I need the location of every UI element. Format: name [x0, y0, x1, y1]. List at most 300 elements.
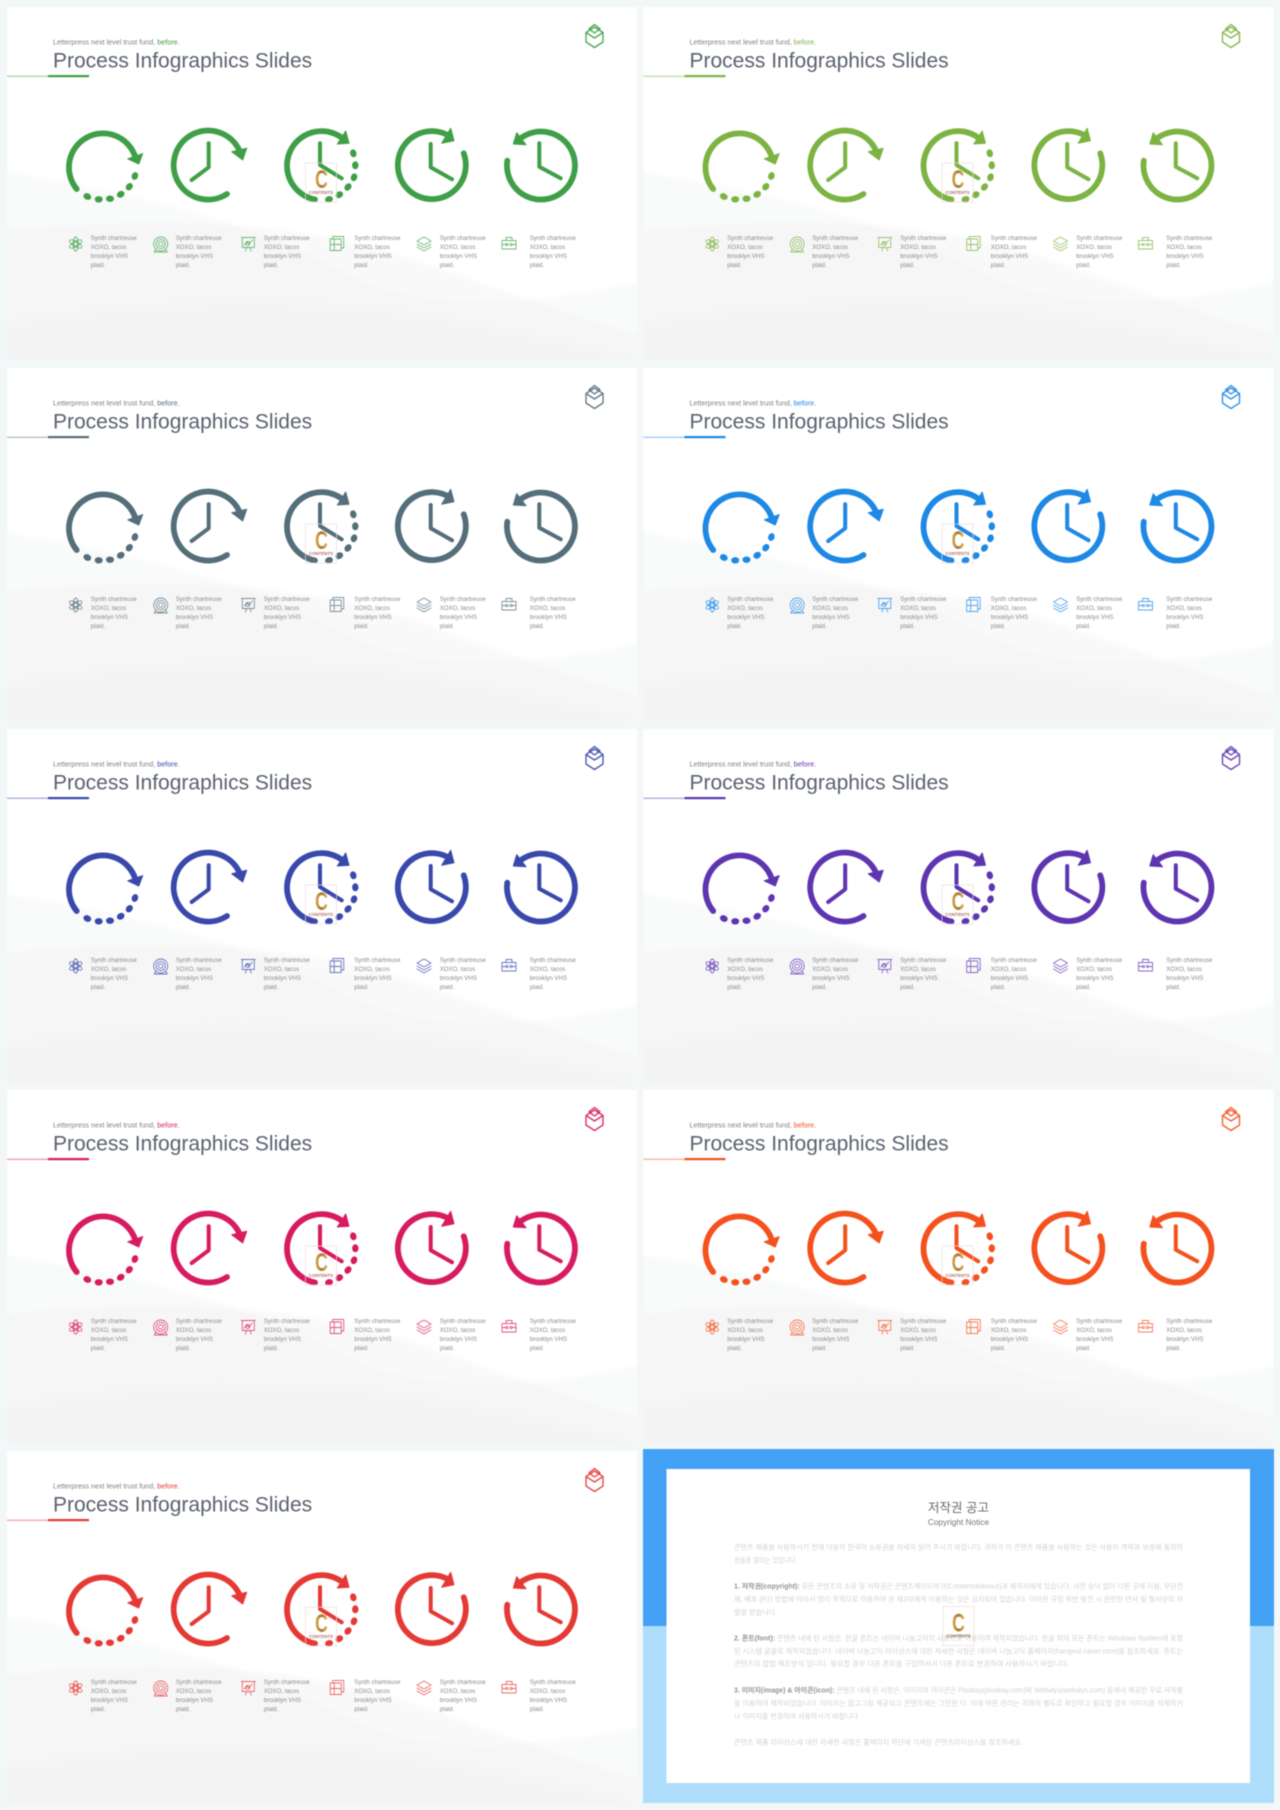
notice section 1: 벌을 받습니다. [734, 1608, 777, 1616]
notice section 3: 3. 이미지(image) & 아이콘(icon): 콘텐츠 내에 된 사항은, 이미지와 아이콘은 Pixabay(pixabay.com)와 Webalys(webalys.com) 등에서 제공한 무료 저작물 [734, 1686, 1184, 1694]
item 5: Synth chartreuse [440, 957, 486, 964]
item 5: XOXO, tacos [440, 1688, 475, 1695]
panel: purple [632, 729, 1280, 1092]
item 5 [1054, 1318, 1123, 1352]
item 1: plaid. [727, 984, 742, 991]
item 6 [1138, 235, 1213, 269]
rule [7, 1519, 89, 1521]
white card [666, 1469, 1250, 1783]
heading: Letterpress next level trust fund, before. [53, 1120, 180, 1130]
item 4: plaid. [354, 623, 369, 630]
item 2: brooklyn VHS [812, 614, 849, 621]
clock 3 [924, 853, 995, 925]
heading [53, 760, 312, 794]
item 3: XOXO, tacos [900, 966, 936, 973]
item 2: XOXO, tacos [176, 1688, 211, 1695]
item 4: Synth chartreuse [354, 957, 400, 964]
item 6: XOXO, tacos [530, 244, 565, 251]
item 5: plaid. [440, 1706, 455, 1713]
item 3: brooklyn VHS [900, 1336, 937, 1343]
watermark [306, 163, 336, 202]
heading: Process Infographics Slides [690, 410, 949, 434]
notice intro: 콘텐츠 제품을 사용하시기 전에 다음의 한국어 소유권을 자세히 읽어 주시기 바랍니다. 귀하가 이 콘텐츠 제품을 사용하는 것은 사용자 계약과 보증에 동의하 [734, 1542, 1184, 1552]
item 2 [790, 235, 859, 269]
item 4: brooklyn VHS [991, 253, 1028, 260]
clock 1 [705, 855, 779, 924]
clock 3 [287, 1214, 358, 1286]
item 5: XOXO, tacos [440, 244, 475, 251]
item 1 [68, 235, 137, 269]
item 5: brooklyn VHS [1076, 253, 1113, 260]
heading: Process Infographics Slides [53, 772, 312, 794]
item 3: plaid. [900, 262, 915, 269]
item 6: plaid. [1166, 623, 1181, 630]
item 6: plaid. [1166, 262, 1181, 269]
item 1 [68, 1679, 137, 1713]
item 3 [241, 957, 310, 991]
notice section 2: 된 시스템 글꼴로 제작되었습니다. 네이버 나눔고딕 라이선스에 대한 자세한 사항은 네이버 나눔고딕 홈페이지(hangeul.naver.com)를 참조하세요. 폰트는 [734, 1646, 1184, 1656]
panel: green [0, 7, 650, 370]
item 2: brooklyn VHS [176, 614, 213, 621]
watermark: CONTENTS [945, 1273, 970, 1278]
clock 2 [174, 1214, 247, 1283]
rule [7, 1158, 89, 1160]
rule [644, 797, 726, 799]
heading [690, 1120, 949, 1156]
item 5 [417, 1318, 486, 1352]
watermark [943, 1606, 974, 1646]
item 2: Synth chartreuse [176, 596, 222, 603]
panel: blue [632, 368, 1280, 731]
heading [53, 1482, 312, 1516]
item 5: plaid. [1076, 623, 1091, 630]
clock 1 [69, 494, 143, 564]
item 3: XOXO, tacos [900, 1327, 936, 1334]
item 1 [68, 1318, 137, 1352]
item 5: plaid. [440, 984, 455, 991]
item 5: XOXO, tacos [440, 605, 475, 612]
notice section 3: 나 이미지를 변경하여 사용하시기 바랍니다. [734, 1712, 860, 1720]
clock 4 [1034, 489, 1102, 560]
item 5: Synth chartreuse [440, 596, 486, 603]
item 1: plaid. [727, 1345, 742, 1352]
clock 2 [174, 1575, 247, 1644]
item 4 [967, 957, 1037, 991]
rule [7, 797, 89, 799]
heading [53, 398, 312, 434]
item 5 [1054, 235, 1123, 269]
item 6: brooklyn VHS [530, 1336, 567, 1343]
icon: cube [586, 1468, 603, 1492]
item 2: XOXO, tacos [812, 244, 848, 251]
item 3 [241, 1318, 310, 1352]
item 3 [241, 1679, 310, 1713]
item 3: XOXO, tacos [264, 605, 299, 612]
heading [690, 38, 949, 72]
item 1: plaid. [91, 623, 106, 630]
item 3: brooklyn VHS [900, 253, 937, 260]
item 4 [967, 1318, 1037, 1352]
heading: Letterpress next level trust fund, before. [53, 760, 180, 768]
item 2: brooklyn VHS [812, 975, 849, 982]
item 2: XOXO, tacos [812, 1327, 848, 1334]
item 6: brooklyn VHS [530, 975, 567, 982]
item 5: plaid. [440, 262, 455, 269]
item 5 [417, 235, 486, 269]
icon: cube [1222, 386, 1240, 408]
item 4: XOXO, tacos [991, 966, 1026, 973]
item 6: plaid. [1166, 1345, 1181, 1352]
item 6: XOXO, tacos [530, 605, 565, 612]
item 2: plaid. [176, 1345, 191, 1352]
item 4: Synth chartreuse [991, 957, 1037, 964]
item 3: XOXO, tacos [264, 1688, 299, 1695]
notice section 1 [734, 1582, 1183, 1616]
notice title [928, 1501, 990, 1527]
item 1: plaid. [91, 262, 106, 269]
rule [644, 75, 726, 77]
watermark: CONTENTS [945, 551, 970, 556]
item 4: plaid. [354, 262, 369, 269]
item 4: XOXO, tacos [354, 605, 390, 612]
heading: Process Infographics Slides [53, 1494, 312, 1516]
item 1: brooklyn VHS [727, 975, 764, 982]
item 4: plaid. [354, 1345, 369, 1352]
clock 3 [287, 1575, 358, 1647]
item 6: Synth chartreuse [1166, 596, 1212, 603]
heading: Letterpress next level trust fund, before. [53, 398, 180, 408]
item 4 [330, 957, 401, 991]
item 1: XOXO, tacos [91, 605, 126, 612]
item 1 [705, 957, 774, 991]
watermark: C [315, 166, 328, 194]
item 3: Synth chartreuse [264, 957, 310, 964]
clock 2 [810, 853, 883, 922]
clock 3 [287, 853, 358, 925]
clock 1 [705, 1216, 779, 1286]
watermark: CONTENTS [309, 1273, 333, 1278]
clock 2 [810, 1214, 883, 1283]
item 3: brooklyn VHS [264, 1336, 301, 1343]
item 5: brooklyn VHS [440, 1697, 477, 1704]
item 1: XOXO, tacos [91, 1327, 126, 1334]
item 6: XOXO, tacos [1166, 244, 1202, 251]
watermark: C [952, 527, 964, 555]
heading: Process Infographics Slides [690, 50, 949, 72]
heading: Process Infographics Slides [690, 1132, 949, 1156]
rule [7, 436, 89, 438]
item 3: Synth chartreuse [264, 1679, 310, 1686]
item 1 [705, 235, 774, 269]
item 5: XOXO, tacos [1076, 244, 1112, 251]
clock 5 [507, 1215, 575, 1283]
item 3 [878, 596, 947, 630]
item 4: brooklyn VHS [354, 253, 392, 260]
clock 5 [1143, 854, 1211, 922]
item 6: XOXO, tacos [1166, 966, 1202, 973]
notice section 2: 2. 폰트(font): 콘텐츠 내에 된 사항은, 한글 폰트는 네이버 나눔고딕의 사용으로 이용하여 제작되었습니다. 한글 외의 모든 폰트는 Windows System에 포함 [734, 1634, 1184, 1642]
item 5: Synth chartreuse [1076, 596, 1122, 603]
item 6: brooklyn VHS [1166, 975, 1203, 982]
watermark: CONTENTS [309, 1634, 333, 1639]
item 2: plaid. [812, 262, 827, 269]
item 5: plaid. [1076, 984, 1091, 991]
watermark: CONTENTS [309, 551, 333, 556]
item 1: brooklyn VHS [727, 253, 764, 260]
heading [690, 760, 949, 794]
item 5: brooklyn VHS [1076, 614, 1113, 621]
item 4: plaid. [991, 623, 1006, 630]
item 5: brooklyn VHS [440, 614, 477, 621]
item 6: Synth chartreuse [530, 1679, 576, 1686]
item 5 [417, 957, 486, 991]
item 4 [967, 235, 1037, 269]
item 1: Synth chartreuse [727, 957, 773, 964]
item 4: XOXO, tacos [354, 966, 390, 973]
item 2: brooklyn VHS [176, 1697, 213, 1704]
watermark: CONTENTS [946, 1634, 971, 1638]
clock 1 [69, 1216, 143, 1286]
item 4: brooklyn VHS [991, 1336, 1028, 1343]
clock 5 [1143, 493, 1211, 561]
item 4: brooklyn VHS [354, 614, 392, 621]
item 1 [68, 957, 137, 991]
item 1: brooklyn VHS [91, 1697, 128, 1704]
clock 2 [174, 131, 247, 200]
item 3: brooklyn VHS [900, 975, 937, 982]
item 1: brooklyn VHS [727, 614, 764, 621]
panel: indigo [0, 729, 650, 1092]
item 2: brooklyn VHS [812, 253, 849, 260]
item 3: XOXO, tacos [900, 605, 936, 612]
item 6: plaid. [530, 1706, 545, 1713]
clock 5 [1143, 1215, 1211, 1283]
heading: Letterpress next level trust fund, before. [690, 760, 816, 768]
item 1: brooklyn VHS [91, 1336, 128, 1343]
watermark [942, 163, 973, 202]
item 3: Synth chartreuse [264, 1318, 310, 1325]
clock 3 [287, 131, 358, 203]
notice intro [734, 1542, 1184, 1564]
item 5: brooklyn VHS [440, 975, 477, 982]
item 5: brooklyn VHS [1076, 1336, 1113, 1343]
panel: slate [0, 368, 650, 731]
item 6: XOXO, tacos [1166, 605, 1202, 612]
item 5: Synth chartreuse [1076, 957, 1122, 964]
icon: cube [1222, 24, 1240, 48]
item 2: XOXO, tacos [176, 605, 211, 612]
clock 3 [287, 492, 358, 564]
item 5: Synth chartreuse [1076, 235, 1122, 242]
item 6 [502, 957, 576, 991]
clock 5 [1143, 132, 1211, 200]
item 2: Synth chartreuse [812, 596, 858, 603]
item 3: plaid. [264, 1706, 279, 1713]
heading [53, 1120, 312, 1156]
clock 4 [398, 1572, 466, 1643]
item 4: brooklyn VHS [354, 975, 392, 982]
clock 4 [1034, 128, 1102, 199]
item 3: XOXO, tacos [900, 244, 936, 251]
item 1: XOXO, tacos [727, 966, 763, 973]
item 4: Synth chartreuse [354, 596, 400, 603]
notice section 2: 콘텐츠의 합법 제조방식 입니다. 필요할 경우 다른 폰트를 구입하셔서 다른 폰트로 변경하여 사용하시기 바랍니다. [734, 1659, 1069, 1668]
item 3 [241, 596, 310, 630]
item 3: XOXO, tacos [264, 244, 299, 251]
item 2: XOXO, tacos [812, 966, 848, 973]
item 2: Synth chartreuse [176, 957, 222, 964]
item 4 [330, 596, 401, 630]
item 6: Synth chartreuse [530, 596, 576, 603]
icon: cube [586, 746, 603, 770]
clock 1 [69, 855, 143, 924]
item 6: Synth chartreuse [530, 957, 576, 964]
item 4: XOXO, tacos [991, 1327, 1026, 1334]
item 1 [705, 596, 774, 630]
clock 2 [810, 131, 883, 200]
item 3: plaid. [900, 984, 915, 991]
item 4: XOXO, tacos [991, 244, 1026, 251]
icon: cube [1222, 1108, 1240, 1130]
item 1: brooklyn VHS [91, 253, 128, 260]
item 4: plaid. [354, 984, 369, 991]
item 1: XOXO, tacos [91, 244, 126, 251]
notice section 2 [734, 1634, 1184, 1668]
item 1: XOXO, tacos [727, 605, 763, 612]
item 3: plaid. [900, 623, 915, 630]
item 2: plaid. [176, 262, 191, 269]
notice intro: 셨음을 알리는 것입니다. [734, 1556, 797, 1564]
watermark [306, 524, 336, 563]
item 6: plaid. [1166, 984, 1181, 991]
watermark: C [952, 1249, 964, 1277]
item 6 [1138, 1318, 1213, 1352]
item 3: plaid. [264, 984, 279, 991]
item 5: XOXO, tacos [440, 966, 475, 973]
item 3: Synth chartreuse [264, 235, 310, 242]
item 5: XOXO, tacos [440, 1327, 475, 1334]
item 3 [878, 235, 947, 269]
item 6 [502, 235, 576, 269]
item 2: plaid. [812, 623, 827, 630]
item 3: plaid. [264, 623, 279, 630]
icon: cube [586, 1108, 603, 1130]
item 6 [1138, 957, 1213, 991]
item 3: XOXO, tacos [264, 966, 299, 973]
panel: orange [632, 1090, 1280, 1453]
clock 5 [507, 854, 575, 922]
item 3: brooklyn VHS [264, 975, 301, 982]
item 2 [154, 596, 222, 630]
item 2 [154, 1318, 222, 1352]
notice section 1: 1. 저작권(copyright): 모든 콘텐츠의 소유 및 저작권은 콘텐츠제이드마크(Contentstokeout)과 제작자에게 있습니다. 사전 승낙 없이 다른 곳에 이용, 무단전 [734, 1582, 1183, 1590]
item 4: brooklyn VHS [991, 975, 1028, 982]
notice footer: 콘텐츠 제품 라이선스에 대한 자세한 사항은 홈페이지 하단에 기재된 콘텐츠라이선스를 참조하세요. [734, 1738, 1023, 1746]
item 1: plaid. [91, 1706, 106, 1713]
item 3: plaid. [264, 262, 279, 269]
item 6: XOXO, tacos [1166, 1327, 1202, 1334]
item 3: brooklyn VHS [264, 614, 301, 621]
item 5: brooklyn VHS [440, 253, 477, 260]
item 5: XOXO, tacos [1076, 1327, 1112, 1334]
item 5: brooklyn VHS [1076, 975, 1113, 982]
item 6: brooklyn VHS [530, 1697, 567, 1704]
item 2: XOXO, tacos [176, 966, 211, 973]
watermark: C [315, 527, 328, 555]
item 4: brooklyn VHS [354, 1336, 392, 1343]
panel: light green [632, 7, 1280, 370]
item 1: Synth chartreuse [727, 1318, 773, 1325]
icon: cube [1222, 746, 1240, 770]
item 6: plaid. [530, 984, 545, 991]
clock 5 [507, 1576, 575, 1644]
item 3: plaid. [900, 1345, 915, 1352]
item 2 [790, 596, 859, 630]
item 2: Synth chartreuse [176, 235, 222, 242]
item 5 [417, 596, 486, 630]
item 6 [502, 1679, 576, 1713]
watermark [306, 1607, 336, 1646]
item 5: plaid. [1076, 1345, 1091, 1352]
item 1 [68, 596, 137, 630]
item 4: XOXO, tacos [354, 244, 390, 251]
item 4: plaid. [991, 262, 1006, 269]
watermark: CONTENTS [309, 190, 333, 195]
item 4: Synth chartreuse [991, 596, 1037, 603]
item 2 [154, 1679, 222, 1713]
watermark: C [315, 1249, 328, 1277]
clock 2 [174, 492, 247, 561]
blue frame [643, 1449, 1274, 1803]
item 1: XOXO, tacos [727, 244, 763, 251]
heading: Process Infographics Slides [53, 410, 312, 434]
watermark [942, 885, 973, 924]
item 4: Synth chartreuse [354, 1318, 400, 1325]
item 5: Synth chartreuse [440, 1679, 486, 1686]
rule [7, 75, 89, 77]
clock 4 [398, 1211, 466, 1282]
item 2: XOXO, tacos [176, 244, 211, 251]
item 5: Synth chartreuse [440, 1318, 486, 1325]
item 4 [330, 1679, 401, 1713]
item 1: plaid. [91, 984, 106, 991]
item 3: Synth chartreuse [900, 957, 946, 964]
watermark: CONTENTS [945, 912, 970, 917]
item 6: XOXO, tacos [530, 966, 565, 973]
item 2 [154, 235, 222, 269]
item 3: Synth chartreuse [900, 596, 946, 603]
clock 2 [810, 492, 883, 561]
notice section 3 [734, 1686, 1184, 1720]
panel: red [0, 1451, 650, 1810]
watermark: C [952, 888, 964, 916]
item 6: brooklyn VHS [530, 614, 567, 621]
item 6: XOXO, tacos [530, 1688, 565, 1695]
item 6: brooklyn VHS [1166, 253, 1203, 260]
clock 4 [398, 850, 466, 921]
panel: pink [0, 1090, 650, 1453]
item 4: Synth chartreuse [354, 1679, 400, 1686]
item 4: plaid. [991, 1345, 1006, 1352]
icon: cube [586, 24, 603, 48]
item 1: XOXO, tacos [91, 1688, 126, 1695]
item 2: Synth chartreuse [812, 957, 858, 964]
item 4: plaid. [354, 1706, 369, 1713]
item 2: plaid. [812, 984, 827, 991]
item 2: XOXO, tacos [812, 605, 848, 612]
item 6: plaid. [530, 1345, 545, 1352]
clock 4 [398, 489, 466, 560]
